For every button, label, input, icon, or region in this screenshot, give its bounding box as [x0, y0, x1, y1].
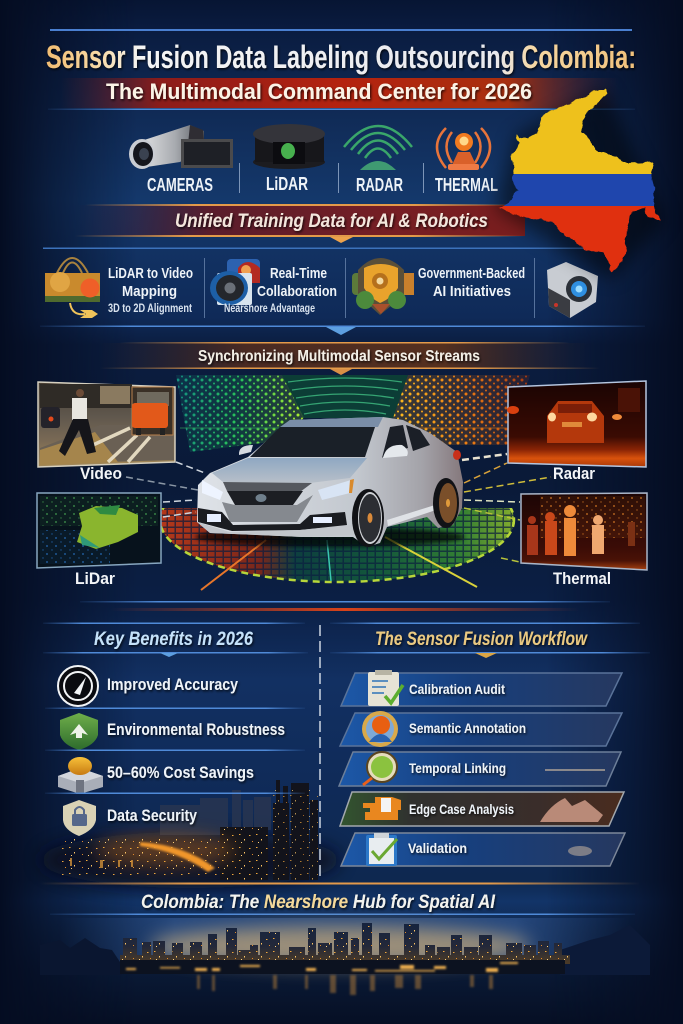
step: calibration audit	[341, 670, 622, 706]
subtitle band	[48, 78, 635, 110]
section divider	[80, 601, 610, 611]
text: government-backed ai initiatives: Government-Backed	[418, 266, 525, 282]
step: validation: Validation	[408, 840, 467, 856]
step: calibration audit: Calibration Audit	[409, 681, 505, 697]
step: semantic annotation	[340, 711, 622, 747]
text: lidar to video mapping: Mapping	[122, 283, 177, 300]
green lidar beam	[176, 375, 304, 452]
door sill	[387, 505, 436, 526]
vertical dashed divider	[319, 625, 321, 880]
icon: government shield	[352, 258, 414, 315]
mirrors	[239, 445, 408, 458]
heading: The Sensor Fusion Workflow	[375, 629, 588, 650]
icon: thermal	[437, 128, 490, 170]
side windows	[382, 425, 430, 458]
bumper lip	[197, 522, 355, 537]
item: Environmental Robustness	[107, 721, 285, 739]
band: unified training data	[75, 204, 525, 243]
icon: security shield	[63, 800, 96, 836]
panel: workflow	[330, 622, 650, 866]
icon: green shield	[60, 713, 98, 750]
rear wheel	[433, 478, 459, 528]
sensor fan beams	[176, 375, 530, 452]
city behind benefits	[40, 780, 340, 888]
item: Improved Accuracy	[107, 676, 239, 694]
icon: real-time collaboration	[210, 259, 260, 305]
panel: lidar	[37, 493, 161, 568]
panel: key benefits	[43, 622, 308, 836]
subtitle band: The Multimodal Command Center for 2026	[106, 79, 532, 104]
label: lidar: LiDar	[75, 569, 115, 588]
text: lidar to video mapping: LiDAR to Video	[108, 265, 193, 282]
pedestrian	[59, 389, 96, 456]
lower center panel	[222, 495, 313, 522]
item: 50–60% Cost Savings	[107, 764, 254, 782]
item: Data Security	[107, 807, 198, 825]
headlights	[202, 479, 354, 500]
label: radar: Radar	[553, 464, 595, 483]
section heading: synchronizing streams: Synchronizing Multimodal Sensor Streams	[198, 348, 480, 365]
ground scan disc	[162, 508, 516, 591]
sensor row	[129, 124, 498, 195]
center arcs	[288, 378, 402, 414]
step: validation	[341, 833, 625, 866]
step: temporal linking	[339, 752, 621, 786]
text: lidar to video mapping: 3D to 2D Alignment	[108, 301, 192, 315]
body	[197, 417, 463, 547]
label: thermal: THERMAL	[435, 175, 498, 195]
icon: gauge	[58, 666, 98, 706]
label: lidar: LiDAR	[266, 174, 308, 194]
skyline	[40, 918, 650, 995]
text: real-time collaboration	[224, 265, 337, 315]
roof	[280, 417, 383, 427]
band: unified training data: Unified Training Data for AI & Robotics	[175, 211, 488, 232]
text: real-time collaboration: Real-Time	[270, 265, 327, 282]
icon: camera	[129, 125, 233, 169]
text: government-backed ai initiatives	[418, 266, 525, 300]
step: semantic annotation: Semantic Annotation	[409, 720, 526, 736]
car	[195, 417, 465, 547]
label: radar: RADAR	[356, 175, 403, 195]
front wheel	[352, 489, 384, 547]
label: thermal: Thermal	[553, 569, 611, 588]
windshield	[250, 427, 375, 457]
panel: thermal	[521, 493, 647, 570]
footer headline: Colombia: The Nearshore Hub for Spatial AI	[141, 892, 496, 913]
icon: radar	[344, 126, 412, 170]
icon: lidar to video mapping	[45, 258, 100, 318]
dark strip under hood	[223, 482, 312, 492]
hood	[212, 458, 367, 483]
map of Colombia	[490, 80, 670, 280]
panel: video	[38, 382, 175, 467]
grille	[227, 491, 303, 505]
step: temporal linking: Temporal Linking	[409, 760, 506, 776]
features row	[40, 248, 645, 335]
panel: radar	[507, 381, 646, 467]
center band	[282, 375, 408, 418]
label: cameras: CAMERAS	[147, 175, 213, 195]
icon: coins and boxes	[58, 757, 103, 794]
label: video: Video	[80, 464, 122, 483]
step: edge case analysis: Edge Case Analysis	[409, 801, 514, 817]
text: government-backed ai initiatives: AI Initiatives	[433, 284, 511, 300]
section heading: synchronizing streams	[100, 342, 600, 375]
dashed connectors	[126, 454, 551, 562]
text: lidar to video mapping	[108, 265, 193, 315]
orange radar beam	[393, 375, 530, 445]
lower intake	[198, 508, 347, 531]
step: edge case analysis	[340, 792, 624, 826]
tail light	[453, 450, 461, 460]
text: real-time collaboration: Collaboration	[257, 283, 337, 300]
icon: sensor unit	[547, 262, 598, 318]
text: real-time collaboration: Nearshore Advantage	[224, 301, 315, 315]
icon: lidar	[253, 124, 325, 169]
heading: Key Benefits in 2026	[94, 629, 253, 650]
